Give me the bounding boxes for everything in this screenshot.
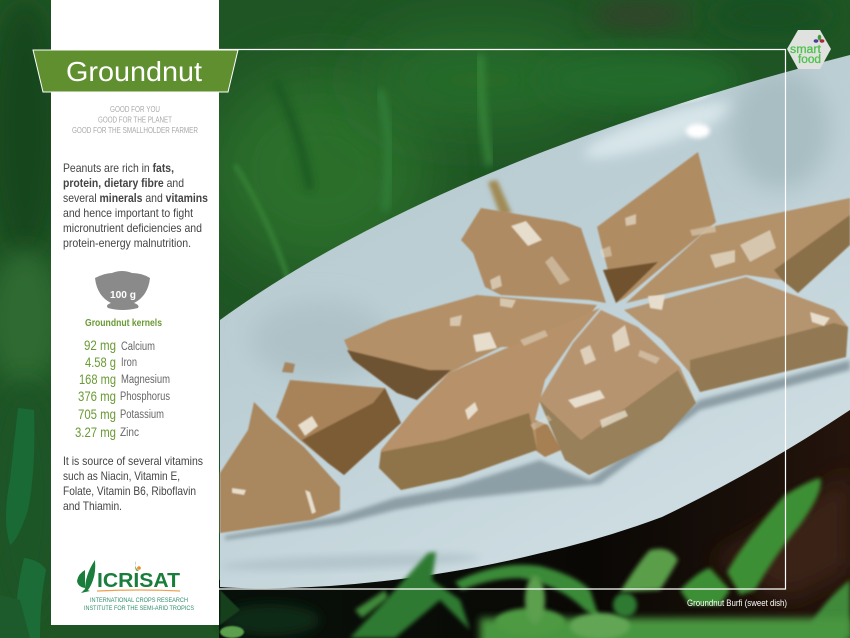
- smart food logo: smart: [790, 44, 822, 56]
- intro text: and hence important to fight: [63, 206, 194, 220]
- caption: photo: Groundnut Burfi (sweet dish): [687, 598, 787, 609]
- nutrient names: Calcium: [121, 341, 155, 353]
- panel: white sidebar: [33, 0, 238, 625]
- nutrient values: 168 mg: [79, 371, 116, 387]
- icon: bowl 100 g: 100 g: [110, 289, 136, 301]
- logo: ICRISAT: INSTITUTE FOR THE SEMI-ARID TROPICS: [84, 605, 195, 612]
- smart food logo: food: [798, 54, 821, 66]
- title banner: [33, 50, 238, 92]
- piece: lower right: [624, 277, 848, 392]
- intro text: Peanuts are rich in fats,: [63, 161, 174, 175]
- nutrient names: Iron: [121, 357, 137, 369]
- piece: top right: [597, 152, 716, 303]
- tagline: GOOD FOR THE PLANET: [98, 114, 172, 124]
- nutrient names: Phosphorus: [120, 391, 170, 403]
- intro text: protein-energy malnutrition.: [63, 236, 191, 250]
- intro text: micronutrient deficiencies and: [63, 221, 202, 235]
- vitamins text: and Thiamin.: [63, 499, 122, 513]
- heading: groundnut kernels: Groundnut kernels: [85, 317, 162, 329]
- piece: small left: [276, 380, 401, 475]
- vitamins text: such as Niacin, Vitamin E,: [63, 469, 180, 483]
- nutrient values: 4.58 g: [85, 354, 116, 370]
- nutrient names: Potassium: [120, 409, 164, 421]
- tagline: GOOD FOR THE SMALLHOLDER FARMER: [72, 125, 198, 135]
- piece: centre left: [379, 308, 600, 490]
- vitamins text: Folate, Vitamin B6, Riboflavin: [63, 484, 196, 498]
- vitamins text: It is source of several vitamins: [63, 454, 203, 468]
- logo: ICRISAT: INTERNATIONAL CROPS RESEARCH: [90, 597, 188, 604]
- piece: bottom centre: [539, 310, 696, 475]
- intro text: protein, dietary fibre and: [63, 176, 184, 190]
- nutrient values: 376 mg: [78, 388, 116, 404]
- photo: white plate: [220, 55, 850, 588]
- title banner: Groundnut: [66, 56, 202, 87]
- nutrient values: [75, 337, 116, 440]
- nutrient values: 92 mg: [84, 337, 116, 353]
- photo: dark plate underside: [219, 400, 850, 638]
- piece: wedge: [220, 402, 340, 533]
- tagline: GOOD FOR YOU: [110, 104, 160, 114]
- logo: ICRISAT: ICRISAT: [97, 570, 180, 592]
- piece: top: [461, 208, 606, 303]
- white frame line: [219, 50, 786, 589]
- piece: right: [626, 198, 850, 303]
- plate shadows: [225, 360, 850, 540]
- grass blades, left: [6, 408, 34, 545]
- smart food logo: [787, 30, 831, 69]
- intro text: [63, 161, 208, 250]
- nutrient names: Zinc: [120, 427, 139, 439]
- piece: left: [344, 295, 597, 400]
- burfi pieces on the plate: [220, 152, 850, 540]
- icon: bowl 100 g: [95, 271, 150, 310]
- crumb: [535, 420, 561, 457]
- nutrient values: 705 mg: [78, 406, 116, 422]
- logo: ICRISAT: [77, 560, 195, 612]
- nutrient values: 3.27 mg: [75, 424, 116, 440]
- intro text: several minerals and vitamins: [63, 191, 208, 205]
- tagline: [72, 104, 198, 135]
- nutrient names: Magnesium: [121, 374, 170, 386]
- nutrient names: [120, 341, 170, 439]
- coconut flakes: [232, 214, 830, 514]
- foreground leaves: [220, 478, 850, 638]
- vitamins text: [63, 454, 203, 513]
